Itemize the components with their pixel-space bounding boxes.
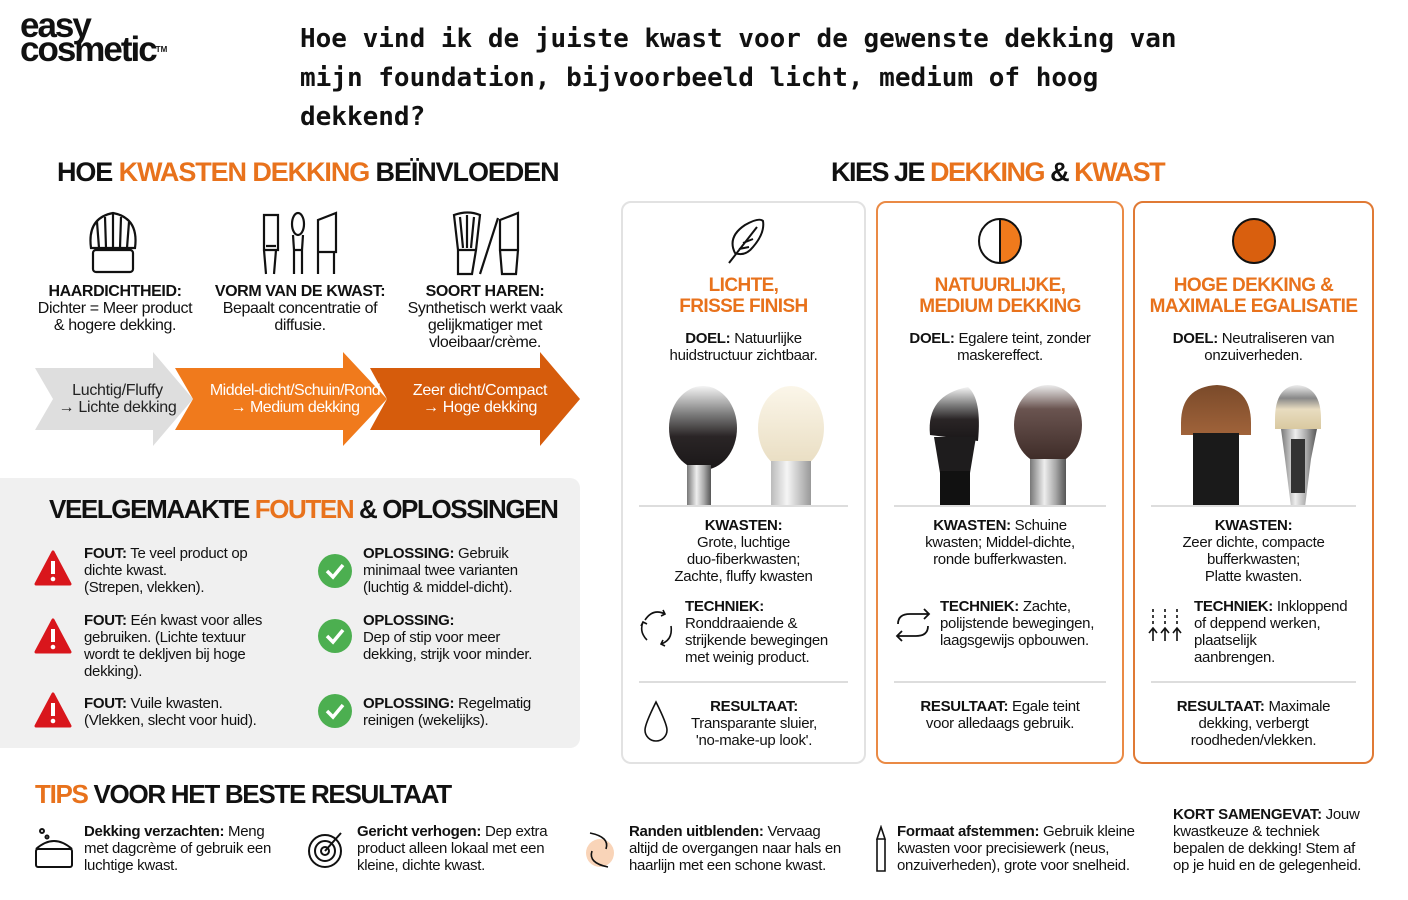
doel <box>878 330 1122 364</box>
kwasten <box>878 517 1122 568</box>
arrow label: high: Zeer dicht/Compact <box>413 382 547 399</box>
arrow label: light <box>59 382 176 416</box>
logo: easy <box>20 6 90 45</box>
kwasten: Platte kwasten. <box>1205 568 1302 585</box>
icon: check 3 <box>318 694 352 728</box>
text: fout 1: FOUT: Te veel product op <box>84 545 247 562</box>
tip 5: summary: bepalen de dekking! Stem af <box>1173 840 1355 857</box>
icon: kabuki brush <box>89 212 137 274</box>
panel: fouten & oplossingen <box>0 478 580 748</box>
doel <box>1135 330 1372 364</box>
text: oplossing 2: dekking, strijk voor minder. <box>363 646 532 663</box>
tip 3: Randen uitblenden: Vervaag <box>629 823 820 840</box>
tip 1: luchtige kwast. <box>84 857 178 874</box>
kwasten: bufferkwasten; <box>1207 551 1300 568</box>
icon: cycle <box>892 606 934 644</box>
text: oplossing 1: (luchtig & middel-dicht). <box>363 579 512 596</box>
card: medium coverage <box>876 201 1124 764</box>
kwasten <box>623 517 864 585</box>
arrow label: medium: → Medium dekking <box>231 399 359 416</box>
tip 5: summary: KORT SAMENGEVAT: Jouw <box>1173 806 1360 823</box>
icon: full circle <box>1231 217 1277 265</box>
title: FRISSE FINISH <box>679 296 808 317</box>
icon: drop <box>641 700 671 744</box>
resultaat <box>878 698 1122 732</box>
text block: soort haren: Synthetisch werkt vaak <box>408 300 562 317</box>
tip 3: haarlijn met een schone kwast. <box>629 857 826 874</box>
title <box>878 275 1122 317</box>
heading: fouten: VEELGEMAAKTE FOUTEN & OPLOSSINGEN <box>49 494 558 524</box>
techniek: TECHNIEK: Inkloppend <box>1194 598 1347 615</box>
heading: tips: TIPS VOOR HET BESTE RESULTAAT <box>35 779 451 809</box>
title: HOGE DEKKING & <box>1174 275 1333 296</box>
kwasten: ronde bufferkwasten. <box>933 551 1067 568</box>
text: oplossing 3: reinigen (wekelijks). <box>363 712 488 729</box>
tip 3 <box>629 823 841 874</box>
tip 4: kwasten voor precisiewerk (neus, <box>897 840 1109 857</box>
card: light coverage <box>621 201 866 764</box>
text block: haardichtheid: Dichter = Meer product <box>38 300 192 317</box>
text: fout 3 <box>84 695 257 729</box>
brushes <box>878 383 1122 507</box>
resultaat: Transparante sluier, <box>691 715 817 732</box>
kwasten: KWASTEN: <box>705 517 782 534</box>
tip 1 <box>84 823 271 874</box>
title: Hoe vind ik de juiste kwast voor de gewenste dekking van mijn foundation, bijvoorbeeld licht, medium of hoog dekkend? <box>300 24 1177 132</box>
techniek: of deppend werken, <box>1194 615 1320 632</box>
kwasten <box>1135 517 1372 585</box>
logo: cosmeticTM <box>20 30 167 69</box>
text block: vorm <box>215 283 385 334</box>
icon: check 1 <box>318 554 352 588</box>
arrow label: high <box>413 382 548 416</box>
tip 1: met dagcrème of gebruik een <box>84 840 271 857</box>
text block: soort haren <box>408 283 563 351</box>
text: fout 2: FOUT: Eén kwast voor alles <box>84 612 262 629</box>
tip 3: altijd de overgangen naar hals en <box>629 840 841 857</box>
logo <box>20 6 167 69</box>
text: fout 1 <box>84 545 248 596</box>
techniek <box>685 598 828 666</box>
text block: soort haren: vloeibaar/crème. <box>429 334 541 351</box>
doel: DOEL: Egalere teint, zonder <box>909 330 1091 347</box>
resultaat: RESULTAAT: Maximale <box>1177 698 1330 715</box>
resultaat: RESULTAAT: Egale teint <box>920 698 1080 715</box>
icon: warning 2 <box>34 618 72 654</box>
card: high coverage <box>1133 201 1374 764</box>
techniek: met weinig product. <box>685 649 809 666</box>
doel: huidstructuur zichtbaar. <box>670 347 817 364</box>
icon: hair types <box>452 211 520 276</box>
arrow label: medium <box>210 382 380 416</box>
techniek: plaatselijk <box>1194 632 1257 649</box>
arrow label: medium: Middel-dicht/Schuin/Rond <box>210 382 380 399</box>
kwasten: duo-fiberkwasten; <box>687 551 800 568</box>
doel <box>670 330 817 364</box>
text: oplossing 1 <box>363 545 518 596</box>
title: MAXIMALE EGALISATIE <box>1150 296 1357 317</box>
doel: maskereffect. <box>957 347 1043 364</box>
text block: haardichtheid <box>38 283 192 334</box>
heading: hoe kwasten dekking beinvloeden: HOE KWASTEN DEKKING BEÏNVLOEDEN <box>57 157 558 187</box>
resultaat: 'no-make-up look'. <box>696 732 812 749</box>
doel: DOEL: Natuurlijke <box>685 330 802 347</box>
techniek: TECHNIEK: Zachte, <box>940 598 1071 615</box>
resultaat <box>659 698 849 749</box>
techniek: TECHNIEK: <box>685 598 764 615</box>
tip 4: onzuiverheden), grote voor snelheid. <box>897 857 1130 874</box>
doel: onzuiverheden. <box>1204 347 1303 364</box>
resultaat: dekking, verbergt <box>1199 715 1308 732</box>
tip 4: Formaat afstemmen: Gebruik kleine <box>897 823 1135 840</box>
text block: soort haren: SOORT HAREN: <box>426 283 544 300</box>
arrows: coverage scale <box>35 352 580 446</box>
text: oplossing 1: OPLOSSING: Gebruik <box>363 545 508 562</box>
brushes <box>623 383 864 507</box>
text: fout 3: FOUT: Vuile kwasten. <box>84 695 222 712</box>
text: fout 2: wordt te dekljven bij hoge <box>84 646 245 663</box>
title: LICHTE, <box>709 275 778 296</box>
techniek: laagsgewijs opbouwen. <box>940 632 1089 649</box>
tip 5: summary <box>1173 806 1361 874</box>
tip 2: product alleen lokaal met een <box>357 840 544 857</box>
tip 2 <box>357 823 548 874</box>
techniek <box>1194 598 1347 666</box>
title <box>1135 275 1372 317</box>
text: oplossing 3: OPLOSSING: Regelmatig <box>363 695 531 712</box>
tips row <box>35 806 1361 874</box>
icon: check 2 <box>318 619 352 653</box>
techniek: polijstende bewegingen, <box>940 615 1094 632</box>
icon: rotate <box>637 606 677 648</box>
text: oplossing 2: Dep of stip voor meer <box>363 629 500 646</box>
text: fout 2: dekking). <box>84 663 142 680</box>
tip 2: Gericht verhogen: Dep extra <box>357 823 547 840</box>
tip 1: Dekking verzachten: Meng <box>84 823 264 840</box>
doel: DOEL: Neutraliseren van <box>1173 330 1334 347</box>
text: fout 1: (Strepen, vlekken). <box>84 579 204 596</box>
text block: haardichtheid: & hogere dekking. <box>54 317 176 334</box>
text block: haardichtheid: HAARDICHTHEID: <box>48 283 182 300</box>
text block: soort haren: gelijkmatiger met <box>428 317 542 334</box>
text block: vorm: diffusie. <box>274 317 326 334</box>
resultaat <box>1135 698 1372 749</box>
text: oplossing 3 <box>363 695 531 729</box>
text: oplossing 2: OPLOSSING: <box>363 612 454 629</box>
icon: feather <box>728 218 764 264</box>
resultaat: voor alledaags gebruik. <box>926 715 1074 732</box>
techniek: aanbrengen. <box>1194 649 1275 666</box>
kwasten: KWASTEN: <box>1215 517 1292 534</box>
text: fout 2 <box>84 612 262 680</box>
kwasten: kwasten; Middel-dichte, <box>925 534 1075 551</box>
text: oplossing 1: minimaal twee varianten <box>363 562 518 579</box>
techniek <box>940 598 1094 649</box>
resultaat: roodheden/vlekken. <box>1191 732 1316 749</box>
text block: vorm: Bepaalt concentratie of <box>223 300 377 317</box>
brushes <box>1135 383 1372 507</box>
arrow label: light: Luchtig/Fluffy <box>72 382 163 399</box>
kwasten: KWASTEN: Schuine <box>933 517 1067 534</box>
icon: warning 3 <box>34 692 72 728</box>
title <box>679 275 808 317</box>
text: oplossing 2 <box>363 612 532 663</box>
icon: cream jar <box>35 828 73 868</box>
tip 4 <box>897 823 1135 874</box>
arrow label: light: → Lichte dekking <box>59 399 176 416</box>
icon: tapping arrows <box>1147 607 1187 643</box>
title: MEDIUM DEKKING <box>919 296 1081 317</box>
icon: target <box>308 832 342 868</box>
tip 2: kleine, dichte kwast. <box>357 857 485 874</box>
icon: thin brush <box>876 825 886 872</box>
icon: brush shapes <box>262 211 338 274</box>
tip 5: summary: op je huid en de gelegenheid. <box>1173 857 1361 874</box>
tip 5: summary: kwastkeuze & techniek <box>1173 823 1319 840</box>
icon: blend <box>586 832 614 868</box>
techniek: Ronddraaiende & <box>685 615 797 632</box>
icon: half circle <box>977 217 1023 265</box>
kwasten: Grote, luchtige <box>697 534 790 551</box>
resultaat: RESULTAAT: <box>710 698 798 715</box>
arrow label: high: → Hoge dekking <box>423 399 537 416</box>
text: fout 1: dichte kwast. <box>84 562 167 579</box>
kwasten: Zeer dichte, compacte <box>1182 534 1325 551</box>
kwasten: Zachte, fluffy kwasten <box>674 568 813 585</box>
techniek: strijkende bewegingen <box>685 632 828 649</box>
icon: warning 1 <box>34 550 72 586</box>
text: fout 2: gebruiken. (Lichte textuur <box>84 629 245 646</box>
text block: vorm: VORM VAN DE KWAST: <box>215 283 385 300</box>
title: NATUURLIJKE, <box>935 275 1065 296</box>
heading: kies je dekking: KIES JE DEKKING & KWAST <box>831 157 1164 187</box>
text: fout 3: (Vlekken, slecht voor huid). <box>84 712 257 729</box>
